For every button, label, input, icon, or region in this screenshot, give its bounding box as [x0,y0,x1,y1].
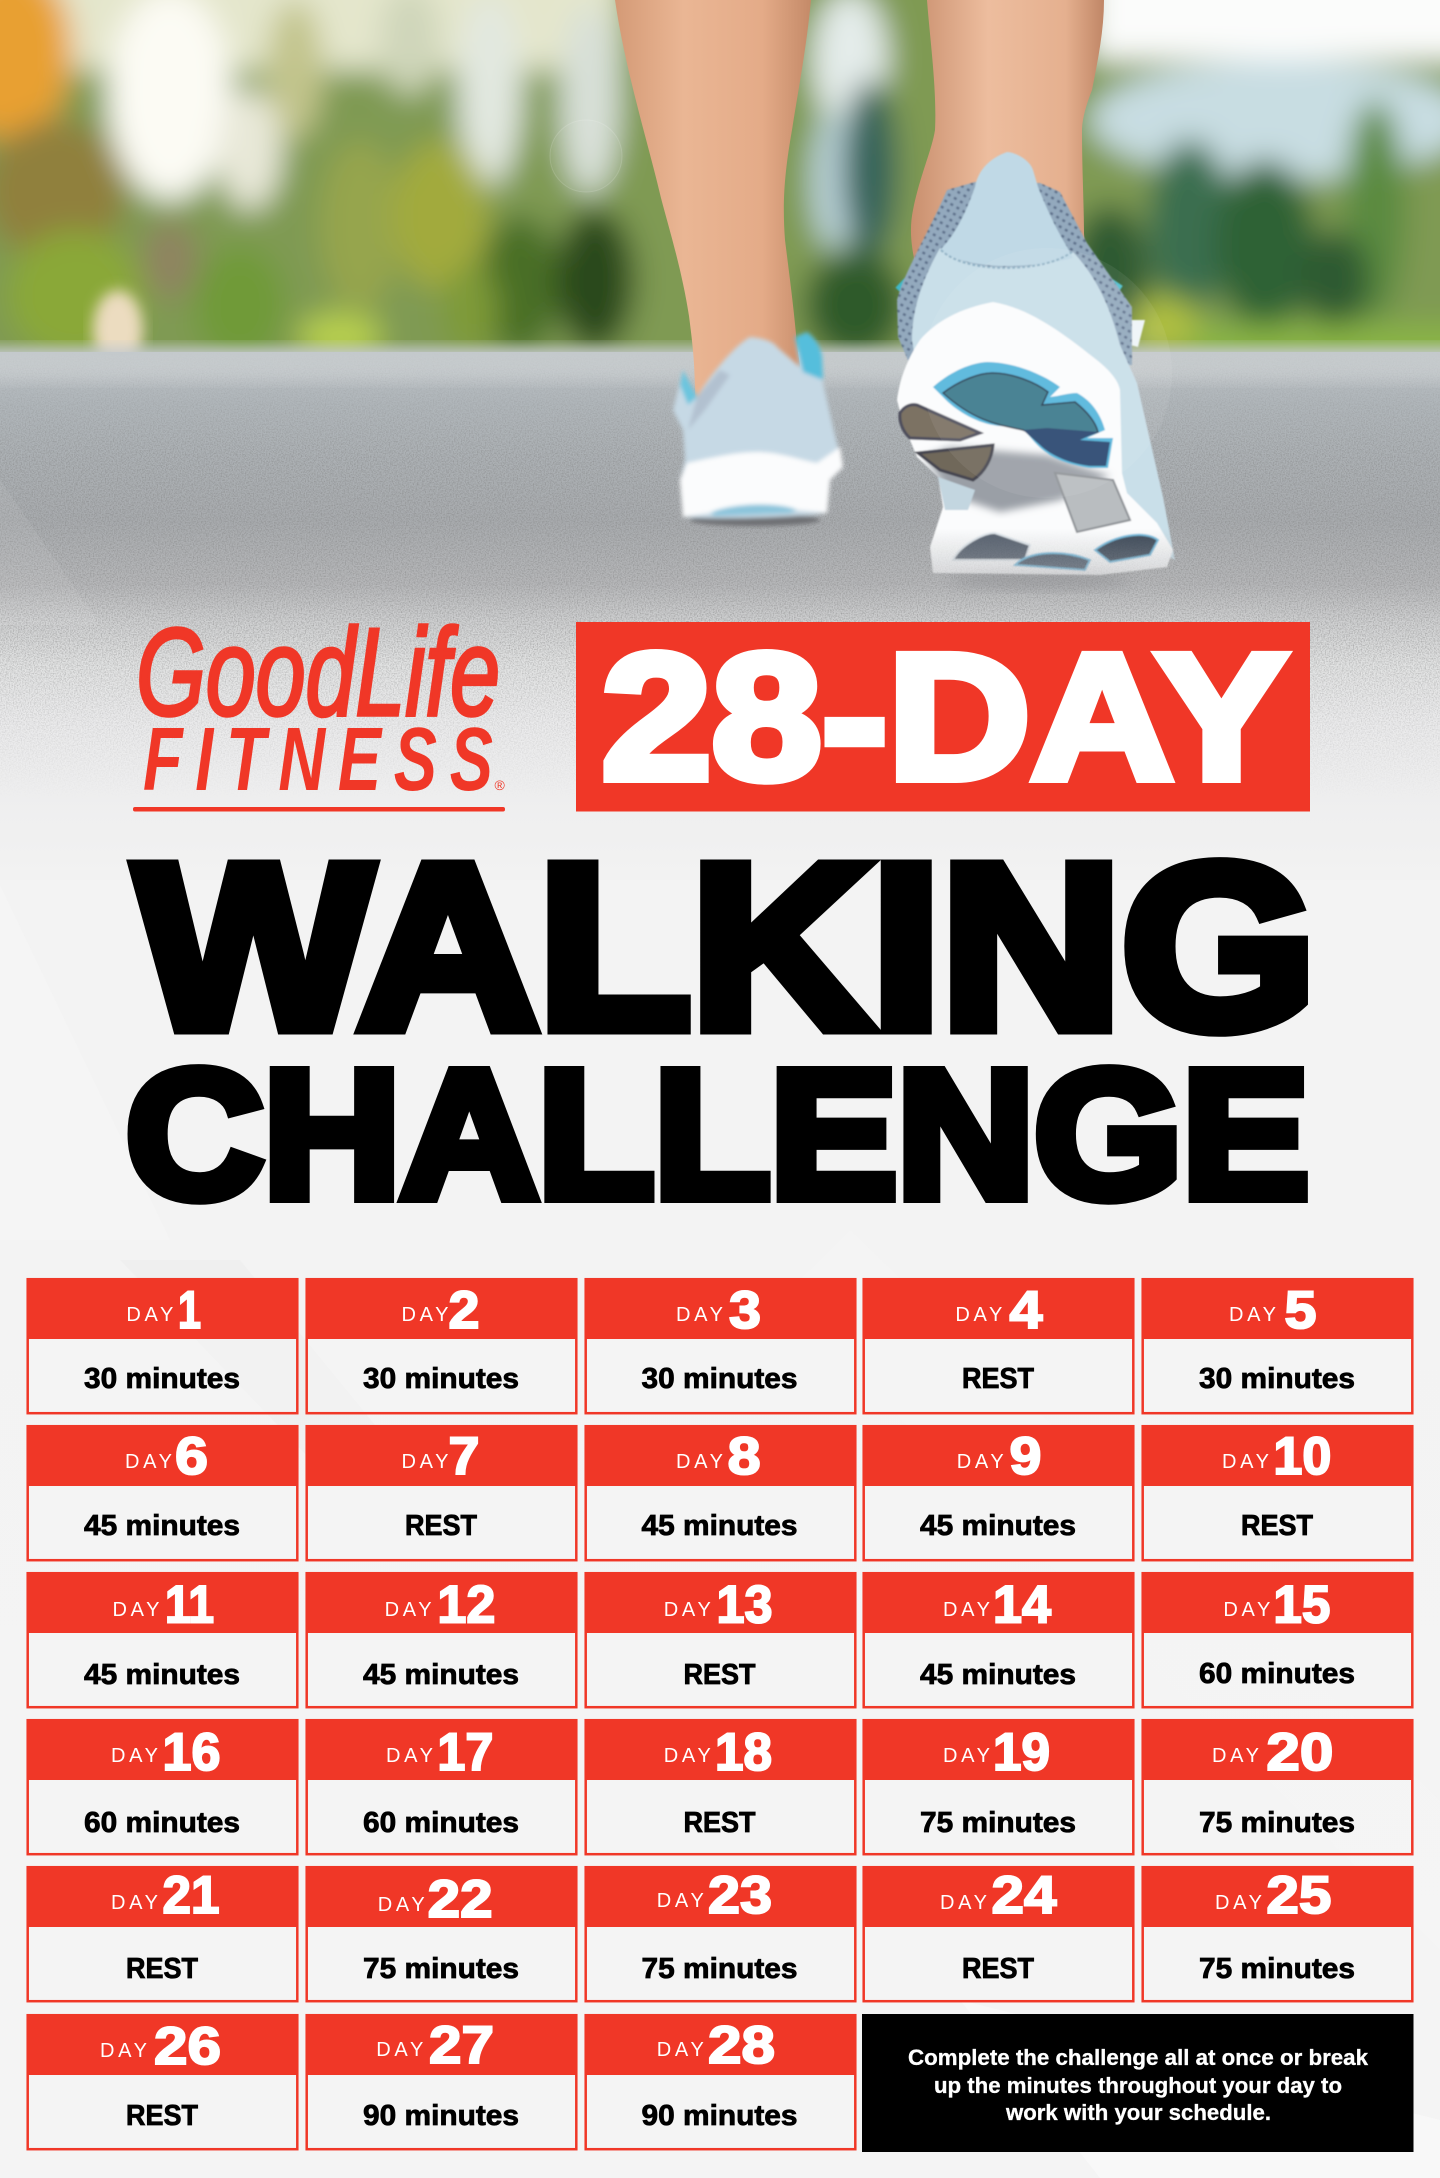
day 2 card [306,1278,578,1413]
day 21 card [26,1866,298,2001]
day 28 card [584,2014,856,2149]
blurred trees and sky [0,0,1440,390]
day 25 card [1142,1866,1414,2001]
logo subtitle: FITNESS [143,709,493,810]
day 27 card: DAY [376,2039,423,2061]
day 24 card: REST [962,1953,1034,1985]
day 3 card: DAY [676,1304,723,1326]
day 4 card: DAY [955,1304,1002,1326]
day 1 card: 30 minutes [84,1363,240,1395]
day 21 card: 21 [162,1866,220,1925]
day 16 card: DAY [111,1745,158,1767]
day 17 card: 60 minutes [363,1807,519,1839]
day 11 card: 45 minutes [84,1659,240,1691]
grey tread pads [900,405,980,440]
day 7 card: REST [405,1510,477,1542]
lens flare [550,120,1172,498]
day 25 card: 25 [1266,1866,1331,1925]
day 13 card: 13 [716,1576,772,1634]
day 13 card [584,1572,856,1707]
day 8 card: 45 minutes [642,1510,798,1542]
day 22 card: DAY [378,1894,425,1916]
day 21 card: DAY [111,1892,158,1914]
day 11 card: DAY [112,1599,160,1621]
day 5 card: DAY [1229,1304,1276,1326]
callout: schedule note: Complete the challenge all at once or break [908,2045,1369,2070]
logo underline [133,807,505,812]
day 5 card [1142,1278,1414,1413]
mesh sides [897,182,1132,365]
day 27 card: 90 minutes [363,2100,519,2132]
day 16 card: 16 [162,1723,220,1782]
day 7 card: DAY [402,1451,448,1473]
day 17 card [306,1719,578,1854]
day 13 card: REST [684,1659,756,1691]
title: WALKING CHALLENGE [126,816,1316,1236]
road [0,352,1440,880]
day 15 card [1142,1572,1414,1707]
day 28 card: 90 minutes [642,2100,798,2132]
day 11 card [26,1572,298,1707]
day 3 card: 3 [729,1281,761,1340]
registered mark: ® [494,777,506,793]
callout: schedule note: work with your schedule. [1005,2100,1271,2125]
day 2 card: 30 minutes [363,1363,519,1395]
day 1 card: 1 [178,1281,201,1340]
right shoe [897,152,1175,590]
logo: GoodLife Fitness [133,604,506,812]
calendar grid [26,1278,1414,2149]
day 15 card: 60 minutes [1199,1658,1355,1690]
hero photo: walker on a road [0,0,1440,792]
day 23 card: 23 [708,1866,772,1925]
day 10 card [1142,1425,1414,1560]
day 9 card: 9 [1010,1427,1042,1486]
day 14 card [862,1572,1134,1707]
day 8 card [584,1425,856,1560]
day 10 card: REST [1241,1510,1313,1542]
day 21 card: REST [126,1953,198,1985]
day 18 card: REST [684,1807,756,1839]
day 24 card: DAY [940,1892,987,1914]
day 8 card: DAY [676,1451,723,1473]
day 2 card: DAY [402,1304,448,1326]
day 15 card: 15 [1273,1576,1330,1634]
logo wordmark: GoodLife [136,604,500,742]
callout: schedule note: up the minutes throughout your day to [934,2073,1342,2098]
heel tab [940,152,1073,266]
day 1 card: DAY [126,1304,173,1326]
road texture [0,370,1440,779]
day 12 card: DAY [385,1599,432,1621]
day 24 card: 24 [992,1866,1057,1925]
day 20 card: 75 minutes [1199,1807,1355,1839]
day 17 card: DAY [386,1745,433,1767]
front tread [953,533,1030,560]
day 26 card: DAY [100,2040,147,2062]
day 4 card [862,1278,1134,1413]
left leg [615,0,811,400]
callout: schedule note [862,2014,1414,2152]
day 6 card: DAY [125,1451,172,1473]
day 19 card: 19 [993,1723,1050,1782]
day 4 card: 4 [1010,1281,1043,1340]
day 4 card: REST [962,1363,1034,1395]
day 20 card: DAY [1212,1745,1259,1767]
day 27 card: 27 [429,2016,494,2075]
day 16 card: 60 minutes [84,1807,240,1839]
day 12 card: 12 [437,1576,495,1634]
day 14 card: 45 minutes [920,1659,1076,1691]
day 11 card: 11 [165,1576,214,1634]
day 18 card [584,1719,856,1854]
day 3 card: 30 minutes [642,1363,798,1395]
day 12 card: 45 minutes [363,1659,519,1691]
day 5 card: 5 [1284,1281,1316,1340]
day 6 card [26,1425,298,1560]
badge: 28-DAY: 28-DAY [602,616,1288,816]
day 6 card: 45 minutes [84,1510,240,1542]
day 25 card: 75 minutes [1199,1953,1355,1985]
day 20 card: 20 [1266,1723,1333,1782]
day 1 card [26,1278,298,1413]
day 20 card [1142,1719,1414,1854]
right leg [911,0,1104,290]
day 25 card: DAY [1215,1892,1262,1914]
day 10 card: 10 [1273,1427,1331,1486]
day 19 card [862,1719,1134,1854]
day 15 card: DAY [1223,1599,1270,1621]
day 14 card: DAY [943,1599,990,1621]
day 2 card: 2 [448,1281,480,1340]
title line 2: CHALLENGE [126,1033,1309,1236]
day 13 card: DAY [664,1599,711,1621]
day 7 card: 7 [448,1427,480,1486]
day 23 card [584,1866,856,2001]
left shoe [673,332,843,526]
day 23 card: DAY [657,1890,704,1912]
under-sole shadow [925,447,1110,512]
day 9 card [862,1425,1134,1560]
day 10 card: DAY [1222,1451,1269,1473]
day 18 card: DAY [664,1745,711,1767]
day 6 card: 6 [175,1427,208,1486]
day 18 card: 18 [715,1723,772,1782]
day 8 card: 8 [728,1427,761,1486]
day 12 card [306,1572,578,1707]
day 28 card: DAY [657,2039,704,2061]
day 17 card: 17 [437,1723,493,1782]
day 22 card: 22 [428,1870,493,1929]
white sole [897,302,1173,575]
pale roadside object [93,290,143,370]
cyan accents [895,278,906,292]
day 7 card [306,1425,578,1560]
day 19 card: DAY [943,1745,990,1767]
day 22 card [306,1866,578,2001]
day 26 card: 26 [154,2017,221,2076]
title line 1: WALKING [136,816,1316,1078]
day 5 card: 30 minutes [1199,1363,1355,1395]
day 9 card: DAY [957,1451,1004,1473]
day 28 card: 28 [708,2016,775,2075]
day 19 card: 75 minutes [920,1807,1076,1839]
day 26 card: REST [126,2100,198,2132]
day 14 card: 14 [993,1576,1052,1634]
day 26 card [26,2014,298,2149]
day 23 card: 75 minutes [642,1953,798,1985]
heel panel [912,248,1175,560]
day 22 card: 75 minutes [363,1953,519,1985]
day 24 card [862,1866,1134,2001]
day 27 card [306,2014,578,2149]
day 3 card [584,1278,856,1413]
day 9 card: 45 minutes [920,1510,1076,1542]
blue heel pad [933,362,1113,468]
day 16 card [26,1719,298,1854]
